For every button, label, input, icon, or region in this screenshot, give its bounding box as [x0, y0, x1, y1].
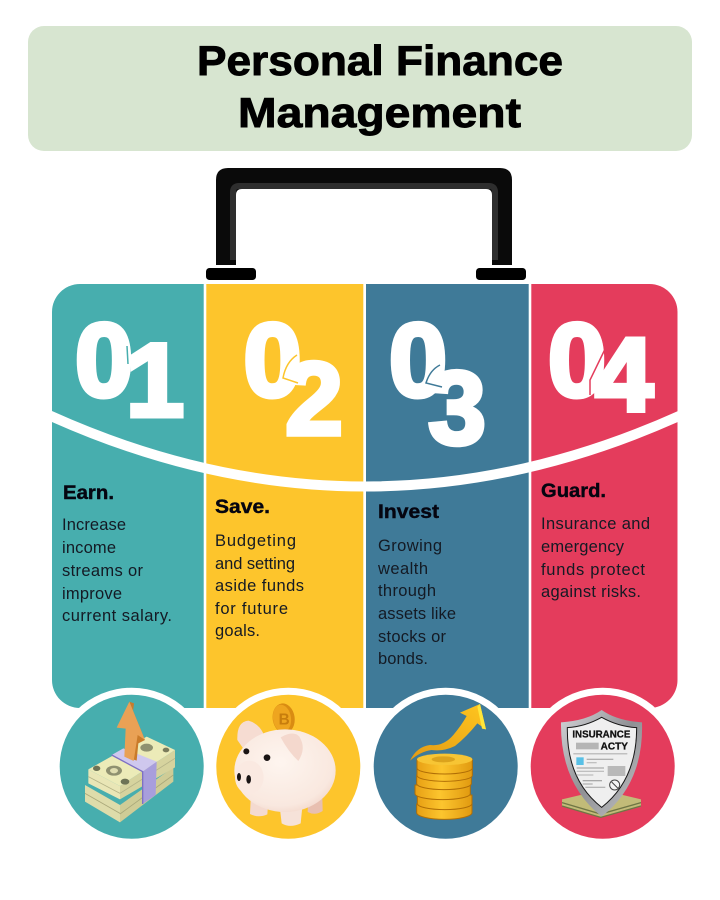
curved divider band	[40, 411, 690, 486]
title	[197, 37, 563, 136]
text block: save: and setting	[215, 555, 295, 573]
text block: earn: Earn.	[63, 483, 114, 504]
numeral 02: 0	[244, 303, 301, 419]
numeral 01: 0	[75, 303, 133, 419]
icon: insurance shield with policy text: ACTY	[601, 742, 629, 753]
text block: guard: against risks.	[541, 583, 641, 601]
text block: guard: Guard.	[541, 481, 606, 502]
text block: guard	[541, 481, 650, 601]
text block: guard: funds protect	[541, 561, 645, 579]
numeral 04	[548, 303, 653, 434]
numeral 03: 3	[428, 351, 486, 467]
numeral 01	[75, 303, 184, 439]
text block: earn: streams or	[62, 562, 144, 580]
title: Management	[238, 89, 521, 136]
text block: invest	[377, 502, 456, 668]
title: Personal Finance	[197, 37, 563, 84]
text block: invest: Invest	[378, 502, 440, 523]
icon: coin stack with growth arrow	[367, 688, 525, 846]
numeral 03: 0	[389, 303, 447, 419]
icon: piggy bank with coin: B	[279, 712, 290, 729]
text block: invest: stocks or	[378, 628, 446, 646]
text block: earn: income	[62, 539, 116, 557]
text block: earn	[62, 483, 172, 625]
text block: earn: Increase	[62, 516, 126, 534]
text block: invest: bonds.	[378, 650, 428, 668]
text block: invest: wealth	[377, 560, 428, 578]
text block: invest: through	[378, 582, 436, 600]
numeral 04: 4	[595, 318, 653, 434]
text block: save: Budgeting	[215, 532, 296, 550]
numeral 02: 2	[285, 342, 343, 458]
icon: insurance shield with policy text	[524, 688, 682, 846]
text block: earn: improve	[62, 585, 122, 603]
icon: insurance shield with policy text: INSURANCE	[572, 730, 631, 741]
numeral 02	[244, 303, 343, 458]
icon: briefcase handle	[206, 168, 526, 280]
text block: invest: Growing	[378, 537, 442, 555]
icon: money stack with up arrow	[53, 688, 211, 846]
text block: save: goals.	[215, 622, 260, 640]
briefcase body panels	[52, 284, 678, 708]
text block: invest: assets like	[378, 605, 456, 623]
text block: save: for future	[215, 600, 288, 618]
numeral 04: 0	[548, 303, 606, 419]
title banner	[28, 26, 692, 151]
text block: earn: current salary.	[62, 607, 172, 625]
numeral 03	[389, 303, 486, 467]
text block: save: Save.	[215, 497, 270, 518]
text block: save	[215, 497, 304, 640]
numeral 01: 1	[126, 323, 184, 439]
icon: piggy bank with coin	[209, 688, 367, 846]
text block: guard: emergency	[541, 538, 625, 556]
text block: save: aside funds	[215, 577, 304, 595]
text block: guard: Insurance and	[541, 515, 650, 533]
